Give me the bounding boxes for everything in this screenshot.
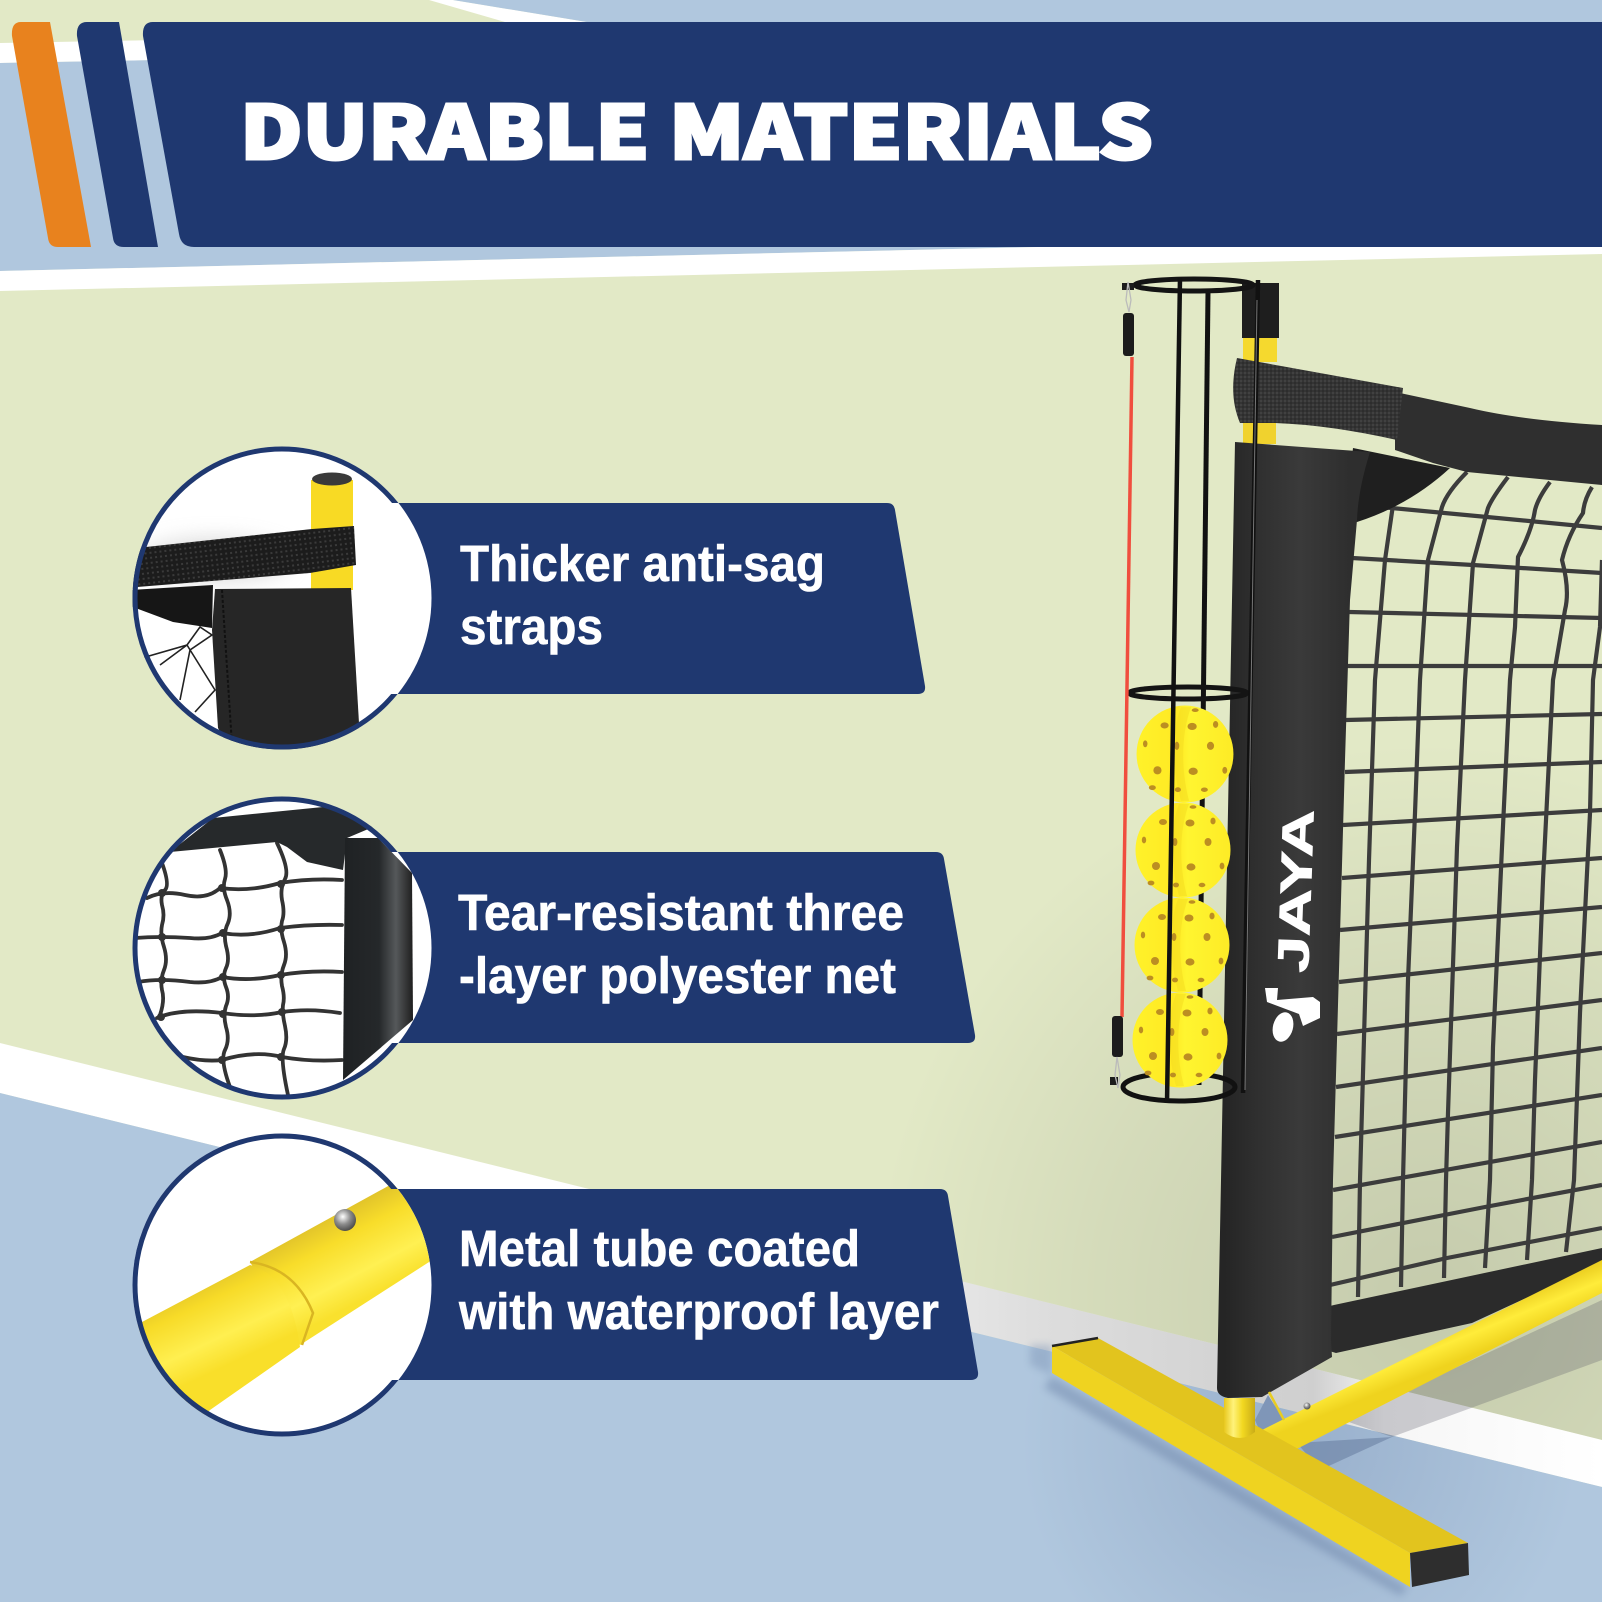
net product illustration bbox=[1030, 278, 1602, 1596]
T-base top face bbox=[1052, 1338, 1468, 1553]
black post cap bbox=[1242, 283, 1279, 338]
background: blue floor bbox=[0, 1093, 1602, 1602]
net shadow on floor bbox=[1030, 1300, 1602, 1596]
circle inset: tube detail bbox=[120, 1134, 440, 1436]
wavy net strings bbox=[135, 843, 342, 1095]
seam bbox=[222, 590, 232, 745]
title: DURABLE MATERIALS bbox=[240, 74, 1153, 181]
inset photo contents bbox=[130, 472, 359, 760]
sleeve logo: JAYA bbox=[1265, 809, 1324, 1044]
side sleeve bbox=[343, 838, 413, 1080]
inset white disc bbox=[132, 1134, 432, 1436]
inset white disc bbox=[132, 796, 432, 1100]
T-base end cap bbox=[1410, 1543, 1469, 1587]
label bar bbox=[300, 852, 975, 1043]
cord handles and clips bbox=[1110, 282, 1134, 1088]
logo paddle mark bbox=[1265, 988, 1320, 1044]
inset photo contents bbox=[138, 1184, 430, 1415]
inset white disc bbox=[132, 446, 432, 750]
panel: net bbox=[132, 796, 975, 1100]
background: blue band behind header bbox=[0, 30, 1602, 271]
navy accent stripe bbox=[77, 22, 158, 247]
header banner bbox=[12, 22, 1602, 247]
soft shading bbox=[140, 538, 290, 582]
stem to base bbox=[1224, 1398, 1255, 1438]
top band bbox=[170, 806, 373, 870]
label text: -layer polyester net bbox=[459, 947, 896, 1004]
ball basket rings bbox=[1129, 279, 1253, 699]
label text: with waterproof layer bbox=[458, 1283, 939, 1340]
background: floor shading near base bbox=[1118, 1384, 1482, 1602]
T-base front face bbox=[1052, 1346, 1410, 1587]
net mesh bbox=[1330, 460, 1602, 1297]
background: court shading near net bbox=[1006, 876, 1602, 1440]
label bar bbox=[300, 503, 925, 694]
label text: Metal tube coated bbox=[459, 1220, 860, 1277]
inset ring bbox=[135, 799, 429, 1097]
top net band bbox=[1395, 392, 1602, 485]
panel: tube bbox=[120, 1134, 978, 1436]
pole cap bbox=[312, 472, 352, 486]
yellow post top stems bbox=[1243, 338, 1277, 444]
main header panel bbox=[143, 22, 1602, 247]
logo wordmark: JAYA bbox=[1269, 809, 1324, 973]
background: lower white court line bbox=[0, 1043, 1602, 1487]
label bar bbox=[300, 1189, 978, 1380]
thin brace bbox=[1269, 1392, 1284, 1420]
inset ring bbox=[135, 1136, 429, 1434]
background: white line under header bbox=[0, 234, 1602, 291]
label text: straps bbox=[460, 598, 603, 655]
tube joint ring bbox=[250, 1262, 313, 1345]
circle inset: strap detail bbox=[130, 446, 432, 760]
circle inset: net detail bbox=[132, 796, 432, 1100]
wider tube section bbox=[138, 1265, 300, 1415]
inset photo contents bbox=[135, 806, 413, 1095]
orange accent stripe bbox=[12, 22, 91, 247]
inner webbing bbox=[130, 585, 213, 628]
narrower tube section bbox=[250, 1184, 430, 1345]
ball basket rear rod and bottom ring bbox=[1123, 292, 1235, 1101]
crossbar tube bbox=[1258, 1260, 1602, 1455]
label text: Thicker anti-sag bbox=[460, 535, 825, 592]
net strings bbox=[135, 627, 215, 712]
panel: straps bbox=[130, 446, 925, 760]
ball basket rods front bbox=[1167, 278, 1258, 1103]
bottom net band bbox=[1326, 1248, 1602, 1353]
net knots bbox=[157, 880, 286, 1064]
T-base far end cap edge bbox=[1052, 1338, 1098, 1346]
webbing strap bbox=[130, 526, 356, 590]
inset ring bbox=[135, 449, 429, 747]
background: top corner blue bbox=[453, 0, 1602, 30]
red bungee cord bbox=[1122, 357, 1132, 1017]
background: upper white court line bbox=[0, 40, 160, 63]
black sleeve bbox=[212, 588, 359, 760]
label text: Tear-resistant three bbox=[458, 884, 904, 941]
yellow pole bbox=[311, 480, 353, 590]
textured strap on post bbox=[1233, 358, 1403, 440]
corner mesh pocket bbox=[1345, 448, 1450, 522]
bolt on crossbar bbox=[1304, 1402, 1310, 1410]
pickleballs bbox=[1132, 706, 1233, 1088]
side sleeve bbox=[1217, 442, 1370, 1398]
silver bolt bbox=[334, 1209, 356, 1231]
background: top corner white line bbox=[429, 0, 587, 22]
